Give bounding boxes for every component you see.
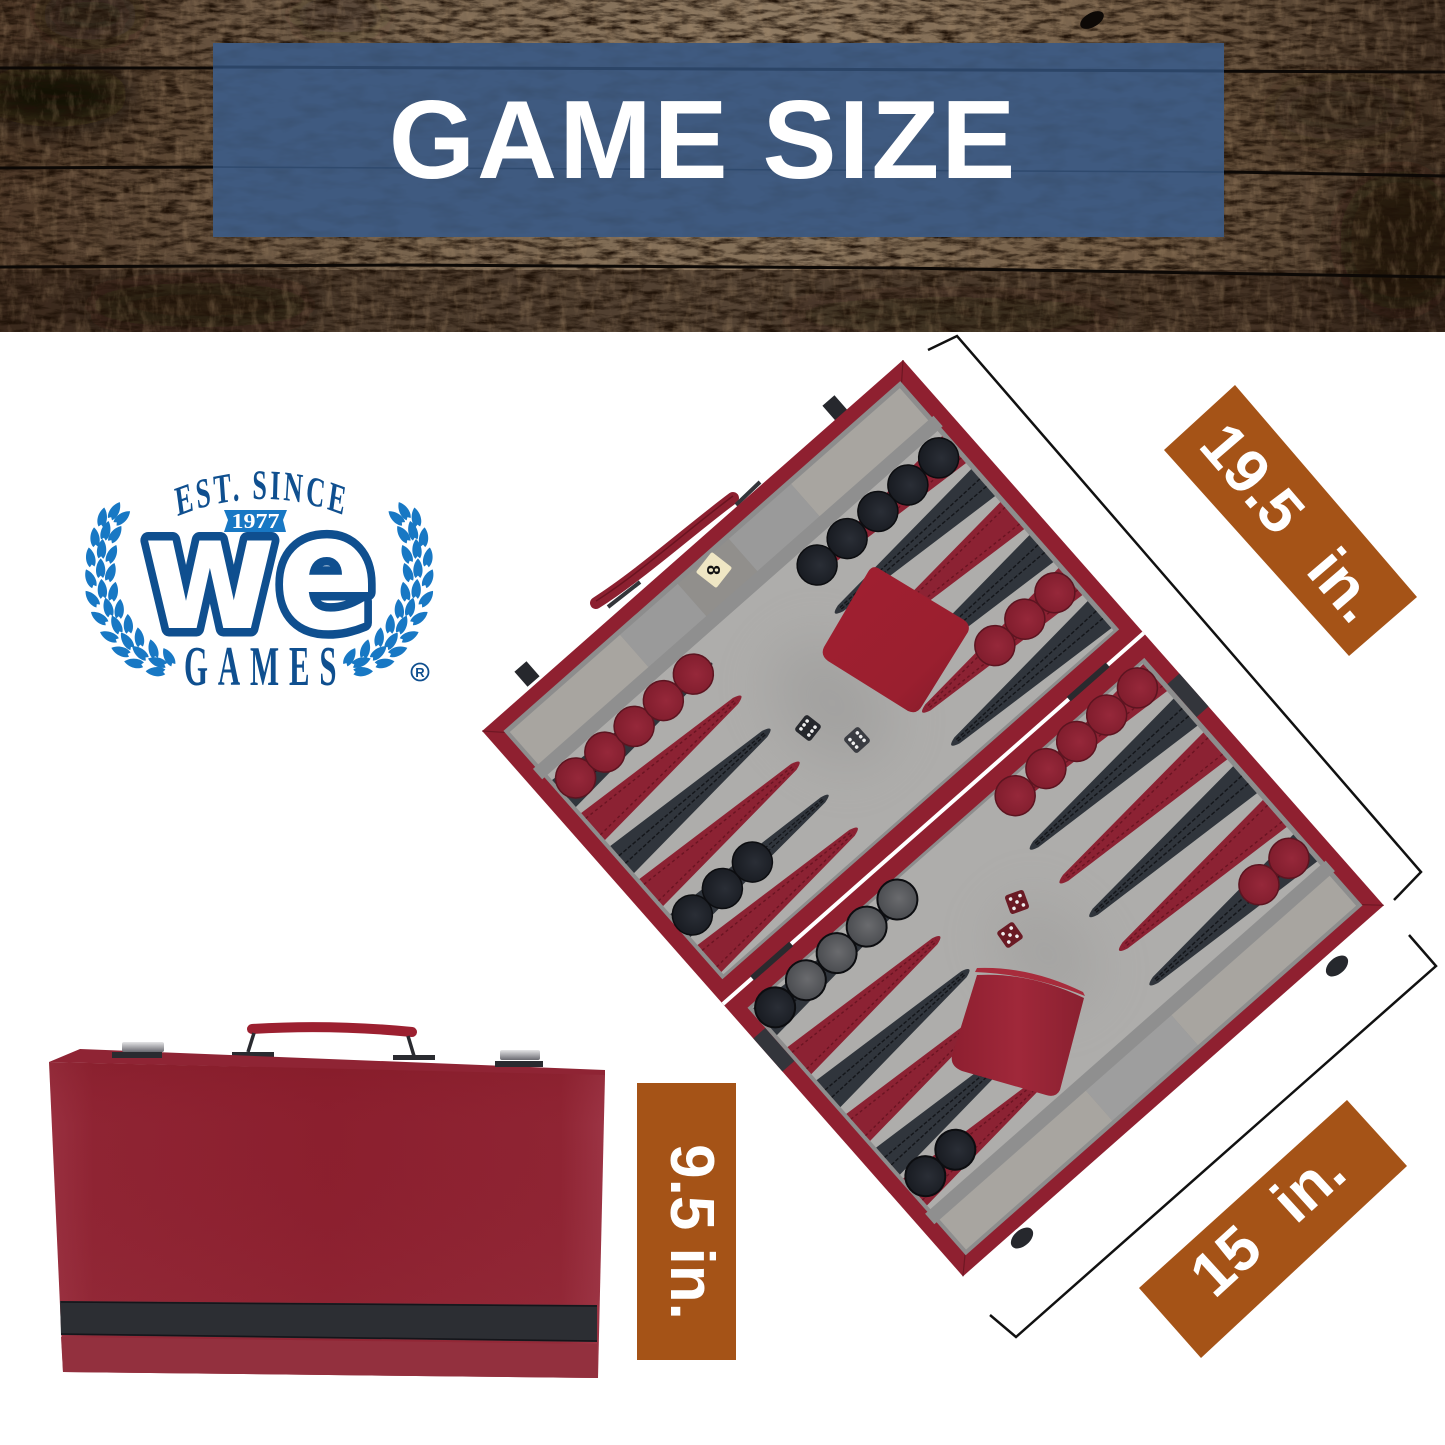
- dimension line: length: [928, 336, 1421, 900]
- title text: GAME SIZE: [389, 78, 1017, 202]
- storage tray: [939, 875, 1356, 1250]
- header: wood plank background: [0, 0, 1445, 333]
- case handle: [232, 1027, 435, 1060]
- case front face: [49, 1062, 605, 1378]
- lower strip: [61, 1337, 598, 1378]
- dice cup lower: [952, 968, 1085, 1096]
- label: 9.5 in.: [637, 1083, 736, 1360]
- closed briefcase: [49, 1027, 605, 1378]
- bottom side points: [552, 649, 870, 972]
- bottom side points: [753, 884, 1068, 1205]
- top side points: [794, 436, 1111, 759]
- 1977 ribbon: 1977: [232, 509, 280, 533]
- top side points: [988, 664, 1317, 999]
- upper half playing field: [501, 380, 1121, 981]
- lower half playing field: [744, 655, 1364, 1257]
- games wordmark: GAMES: [184, 635, 346, 697]
- we wordmark: we: [143, 479, 375, 666]
- open backgammon board: [482, 360, 1384, 1276]
- logo: WE Games: [85, 471, 434, 697]
- label: 19.5 in.: [1164, 385, 1417, 656]
- black stripe: [60, 1301, 597, 1342]
- case latches: [112, 1042, 543, 1067]
- black frame tabs: [1167, 674, 1209, 717]
- dice cup upper: [823, 567, 969, 712]
- ivory doubling die: [696, 552, 732, 588]
- black dice: [794, 714, 871, 754]
- label: 15 in.: [1139, 1100, 1407, 1358]
- label: 15 in.: 15 in.: [1177, 1136, 1359, 1310]
- title banner: [213, 43, 1224, 237]
- registered mark: [412, 664, 428, 680]
- 1977 ribbon: [224, 509, 287, 533]
- black checkers: [747, 871, 1075, 1205]
- rail: [533, 416, 943, 779]
- black checkers: [545, 430, 1086, 943]
- dimension line: width: [990, 935, 1436, 1337]
- label: 19.5 in.: 19.5 in.: [1186, 410, 1393, 635]
- red dice: [996, 889, 1030, 949]
- storage tray: [510, 388, 929, 765]
- red checkers: [547, 431, 1083, 940]
- registered mark: R: [415, 665, 425, 680]
- laurel wreath left: [82, 500, 177, 677]
- est since arched text: EST. SINCE: [174, 471, 345, 516]
- est since arched text: [174, 471, 345, 516]
- ivory doubling die: 8: [703, 565, 723, 575]
- hinge gap: [721, 631, 1146, 1006]
- carry handle: [596, 482, 760, 607]
- rail: [925, 861, 1335, 1224]
- case top surface: [49, 1049, 605, 1076]
- latch tabs: [514, 395, 1352, 1253]
- red checkers: [987, 659, 1317, 995]
- laurel wreath right: [341, 500, 437, 677]
- label: 9.5 in.: 9.5 in.: [657, 1144, 726, 1320]
- case frame: [482, 360, 1384, 1276]
